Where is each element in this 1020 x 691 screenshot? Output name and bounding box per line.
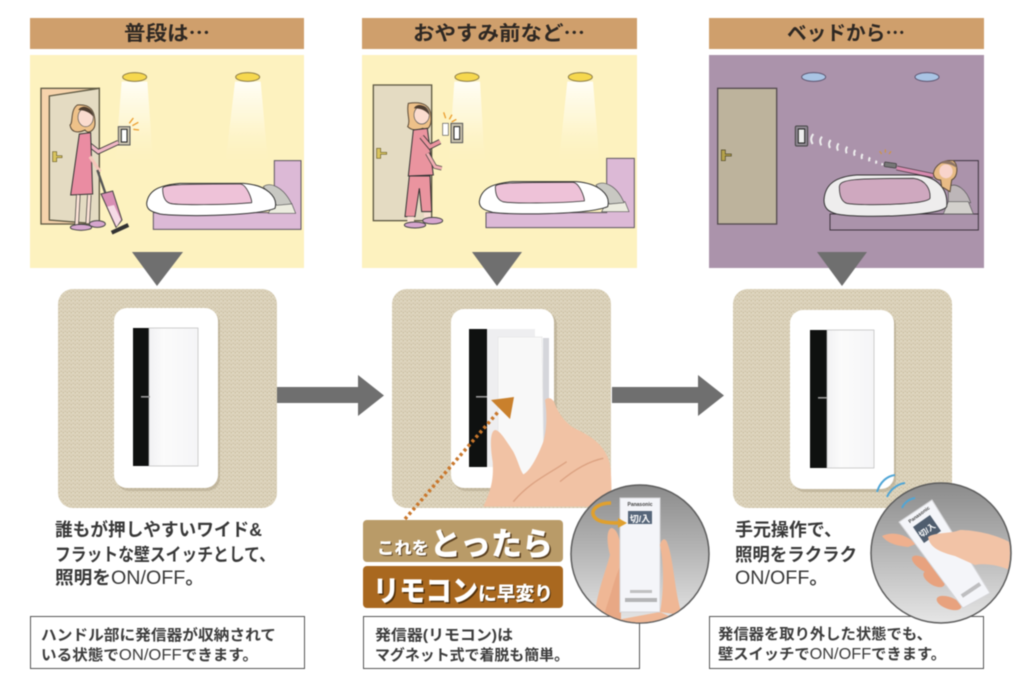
panel: normal use [30,17,304,668]
photo circle: remote in hand: Panasonic [627,502,653,508]
callout: turns into remote [363,566,563,610]
arrow: down from room to switch [132,252,183,286]
photo circle: remote aimed at switch [871,475,1014,623]
note box: normal use: いる状態でON/OFFできます。 [41,646,258,664]
callout: turns into remote: に早変り [479,583,554,606]
note box: from bed: 壁スイッチでON/OFFできます。 [718,646,946,663]
heading: before sleeping: おやすみ前など… [413,17,585,46]
curved orange arrow [593,503,627,528]
callout: take this off: これを [377,539,429,558]
hand holding remote [483,398,612,507]
arrow: step two to step three [612,375,724,416]
heading: before sleeping [362,17,637,49]
description text: from bed: 手元操作で、 [735,520,842,540]
description text: from bed: ON/OFF。 [735,568,828,589]
callout: turns into remote: リモコン [374,578,480,610]
heading: from bed: ベッドから… [787,17,905,46]
arrow: down from room to switch [817,252,867,286]
switch photo: removing handle as remote [392,289,612,519]
note box: normal use: ハンドル部に発信器が収納されて [41,626,276,644]
room scene: woman with remote [362,55,637,268]
description text: normal use: フラットな壁スイッチとして、 [55,545,275,565]
room scene: woman using wall switch [30,55,304,268]
heading: normal use [30,17,304,49]
description text: from bed: 照明をラクラク [735,545,857,565]
heading: from bed [709,17,984,49]
description box: before sleeping: 発信器(リモコン)は [375,626,513,644]
heading: normal use: 普段は… [124,17,210,46]
arrow: down from room to switch [472,252,522,286]
panel: from bed [709,17,1014,668]
arrow: step one to step two [277,375,384,416]
switch photo: wide switch without handle change [733,289,952,508]
description box: before sleeping: マグネット式で着脱も簡単。 [375,646,569,664]
description text: from bed [735,520,857,589]
room scene: woman in bed with remote [709,55,984,268]
callout: turns into remote: リモコン [373,576,478,608]
description box: before sleeping [364,616,640,668]
photo circle: remote aimed at switch: Panasonic [908,505,931,525]
description text: normal use [55,519,275,589]
photo circle: remote in hand: 切/入 [630,514,650,524]
panel: before sleeping [362,17,709,668]
photo circle: remote in hand [571,485,709,640]
signal arcs [877,475,915,508]
description text: normal use: 照明をON/OFF。 [55,568,204,589]
callout: take this off: とったら [432,528,554,564]
photo circle: remote aimed at switch: 切/入 [917,521,937,539]
switch photo: fabric wall with wide switch [58,289,277,508]
orange pointer arrow [405,397,514,519]
callout: take this off: これを [378,540,430,559]
description text: normal use: 誰もが押しやすいワイド& [55,519,262,540]
note box: from bed: 発信器を取り外した状態でも、 [718,625,932,643]
callout: take this off: とったら [430,526,553,562]
note box: normal use [30,616,304,668]
callout: turns into remote: に早変り [478,582,553,605]
callout: take this off [363,520,563,564]
note box: from bed [710,616,984,668]
